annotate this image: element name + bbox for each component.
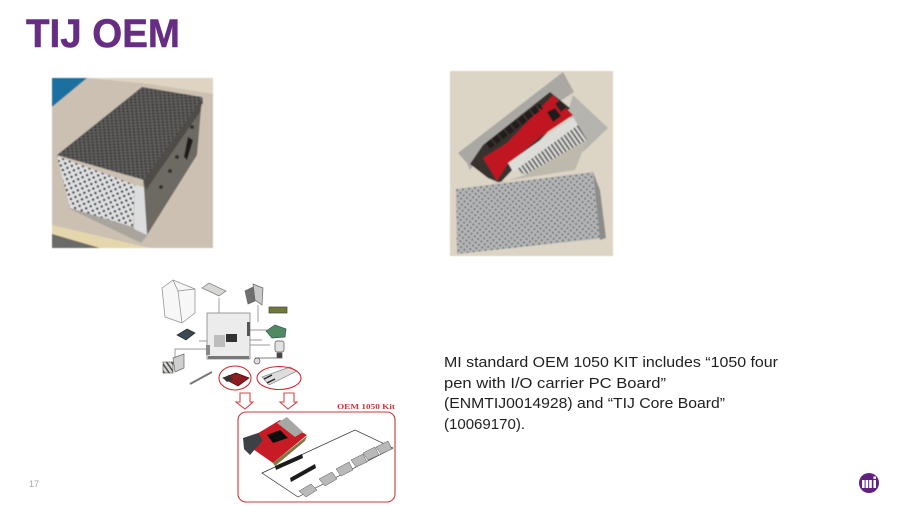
memory module — [269, 307, 287, 313]
description text: (10069170). — [444, 417, 525, 433]
red circled core board — [219, 366, 251, 390]
exploded parts diagram — [162, 280, 301, 390]
photo: opened enclosure with red board — [450, 71, 613, 256]
leader lines — [175, 298, 270, 358]
panel: OEM 1050 kit — [238, 412, 395, 502]
title: TIJ OEM — [26, 12, 180, 56]
fan assembly left — [163, 354, 184, 373]
connector part — [254, 341, 284, 364]
printer outline — [162, 280, 195, 323]
description text — [444, 355, 778, 433]
kit box label: OEM 1050 Kit — [337, 402, 396, 411]
photo: closed perforated enclosure — [52, 78, 213, 248]
description text: MI standard OEM 1050 KIT includes “1050 four — [444, 355, 778, 371]
arrow: to kit right — [280, 393, 297, 409]
description text: (ENMTIJ0014928) and “TIJ Core Board” — [444, 396, 725, 412]
main chassis — [206, 313, 250, 359]
description text: pen with I/O carrier PC Board” — [444, 376, 666, 392]
page number: 17 — [29, 479, 39, 489]
red circled carrier board — [257, 366, 301, 390]
power supply part — [202, 283, 226, 296]
tablet display — [177, 329, 195, 340]
cable — [190, 372, 212, 384]
core board — [243, 417, 307, 466]
arrow: to kit left — [236, 393, 253, 409]
carrier board — [262, 430, 393, 497]
fan assembly top — [245, 284, 263, 305]
icon: MI logo — [859, 473, 879, 493]
green module — [266, 325, 286, 338]
